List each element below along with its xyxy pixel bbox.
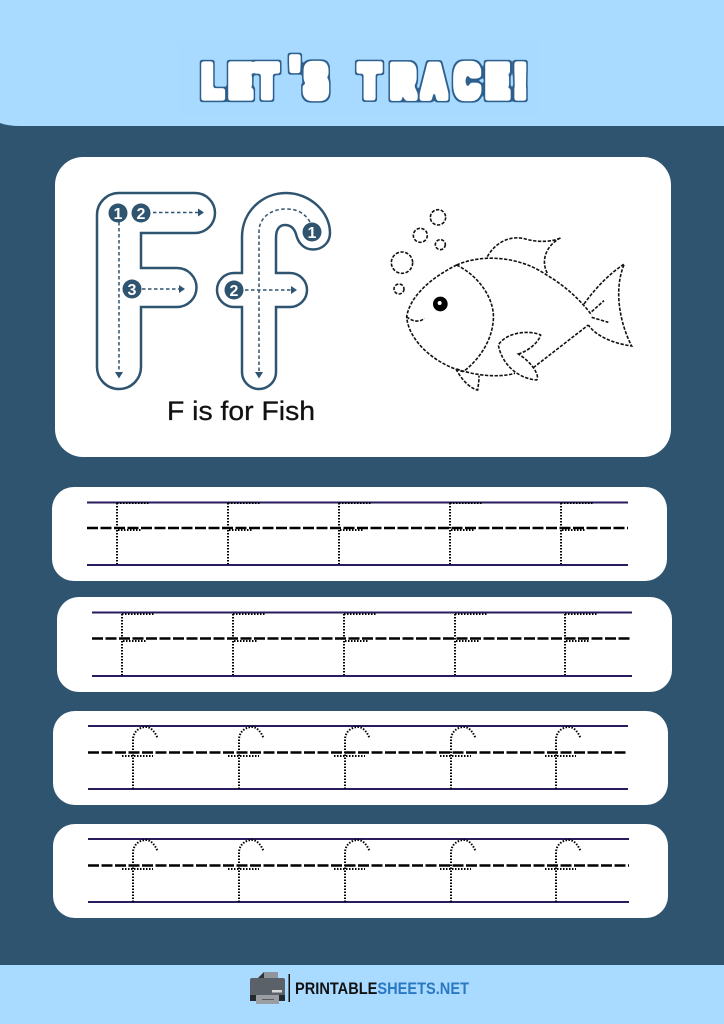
footer band [0, 965, 724, 1024]
letter F tracing guide: 1 [114, 206, 123, 223]
letter F tracing guide [97, 193, 215, 389]
title: LET'S TRACE! [203, 49, 526, 107]
caption: F is for Fish [167, 396, 315, 426]
icon: printer [250, 972, 285, 1004]
fish tracing illustration [391, 210, 632, 390]
divider [288, 974, 290, 1002]
footer brand text: PRINTABLESHEETS.NET [295, 979, 470, 998]
panel: lowercase tracing row 2 [53, 824, 668, 918]
panel: uppercase tracing row 1 [52, 487, 667, 581]
letter f tracing guide [217, 193, 330, 389]
header band [0, 0, 724, 126]
panel: lowercase tracing row 1 [53, 711, 668, 805]
panel: letter and fish [55, 157, 671, 457]
panel: uppercase tracing row 2 [57, 597, 672, 692]
letter F tracing guide: 3 [128, 282, 137, 299]
letter f tracing guide: 2 [230, 283, 239, 300]
letter F tracing guide: 2 [137, 206, 146, 223]
letter f tracing guide: 1 [308, 225, 317, 242]
